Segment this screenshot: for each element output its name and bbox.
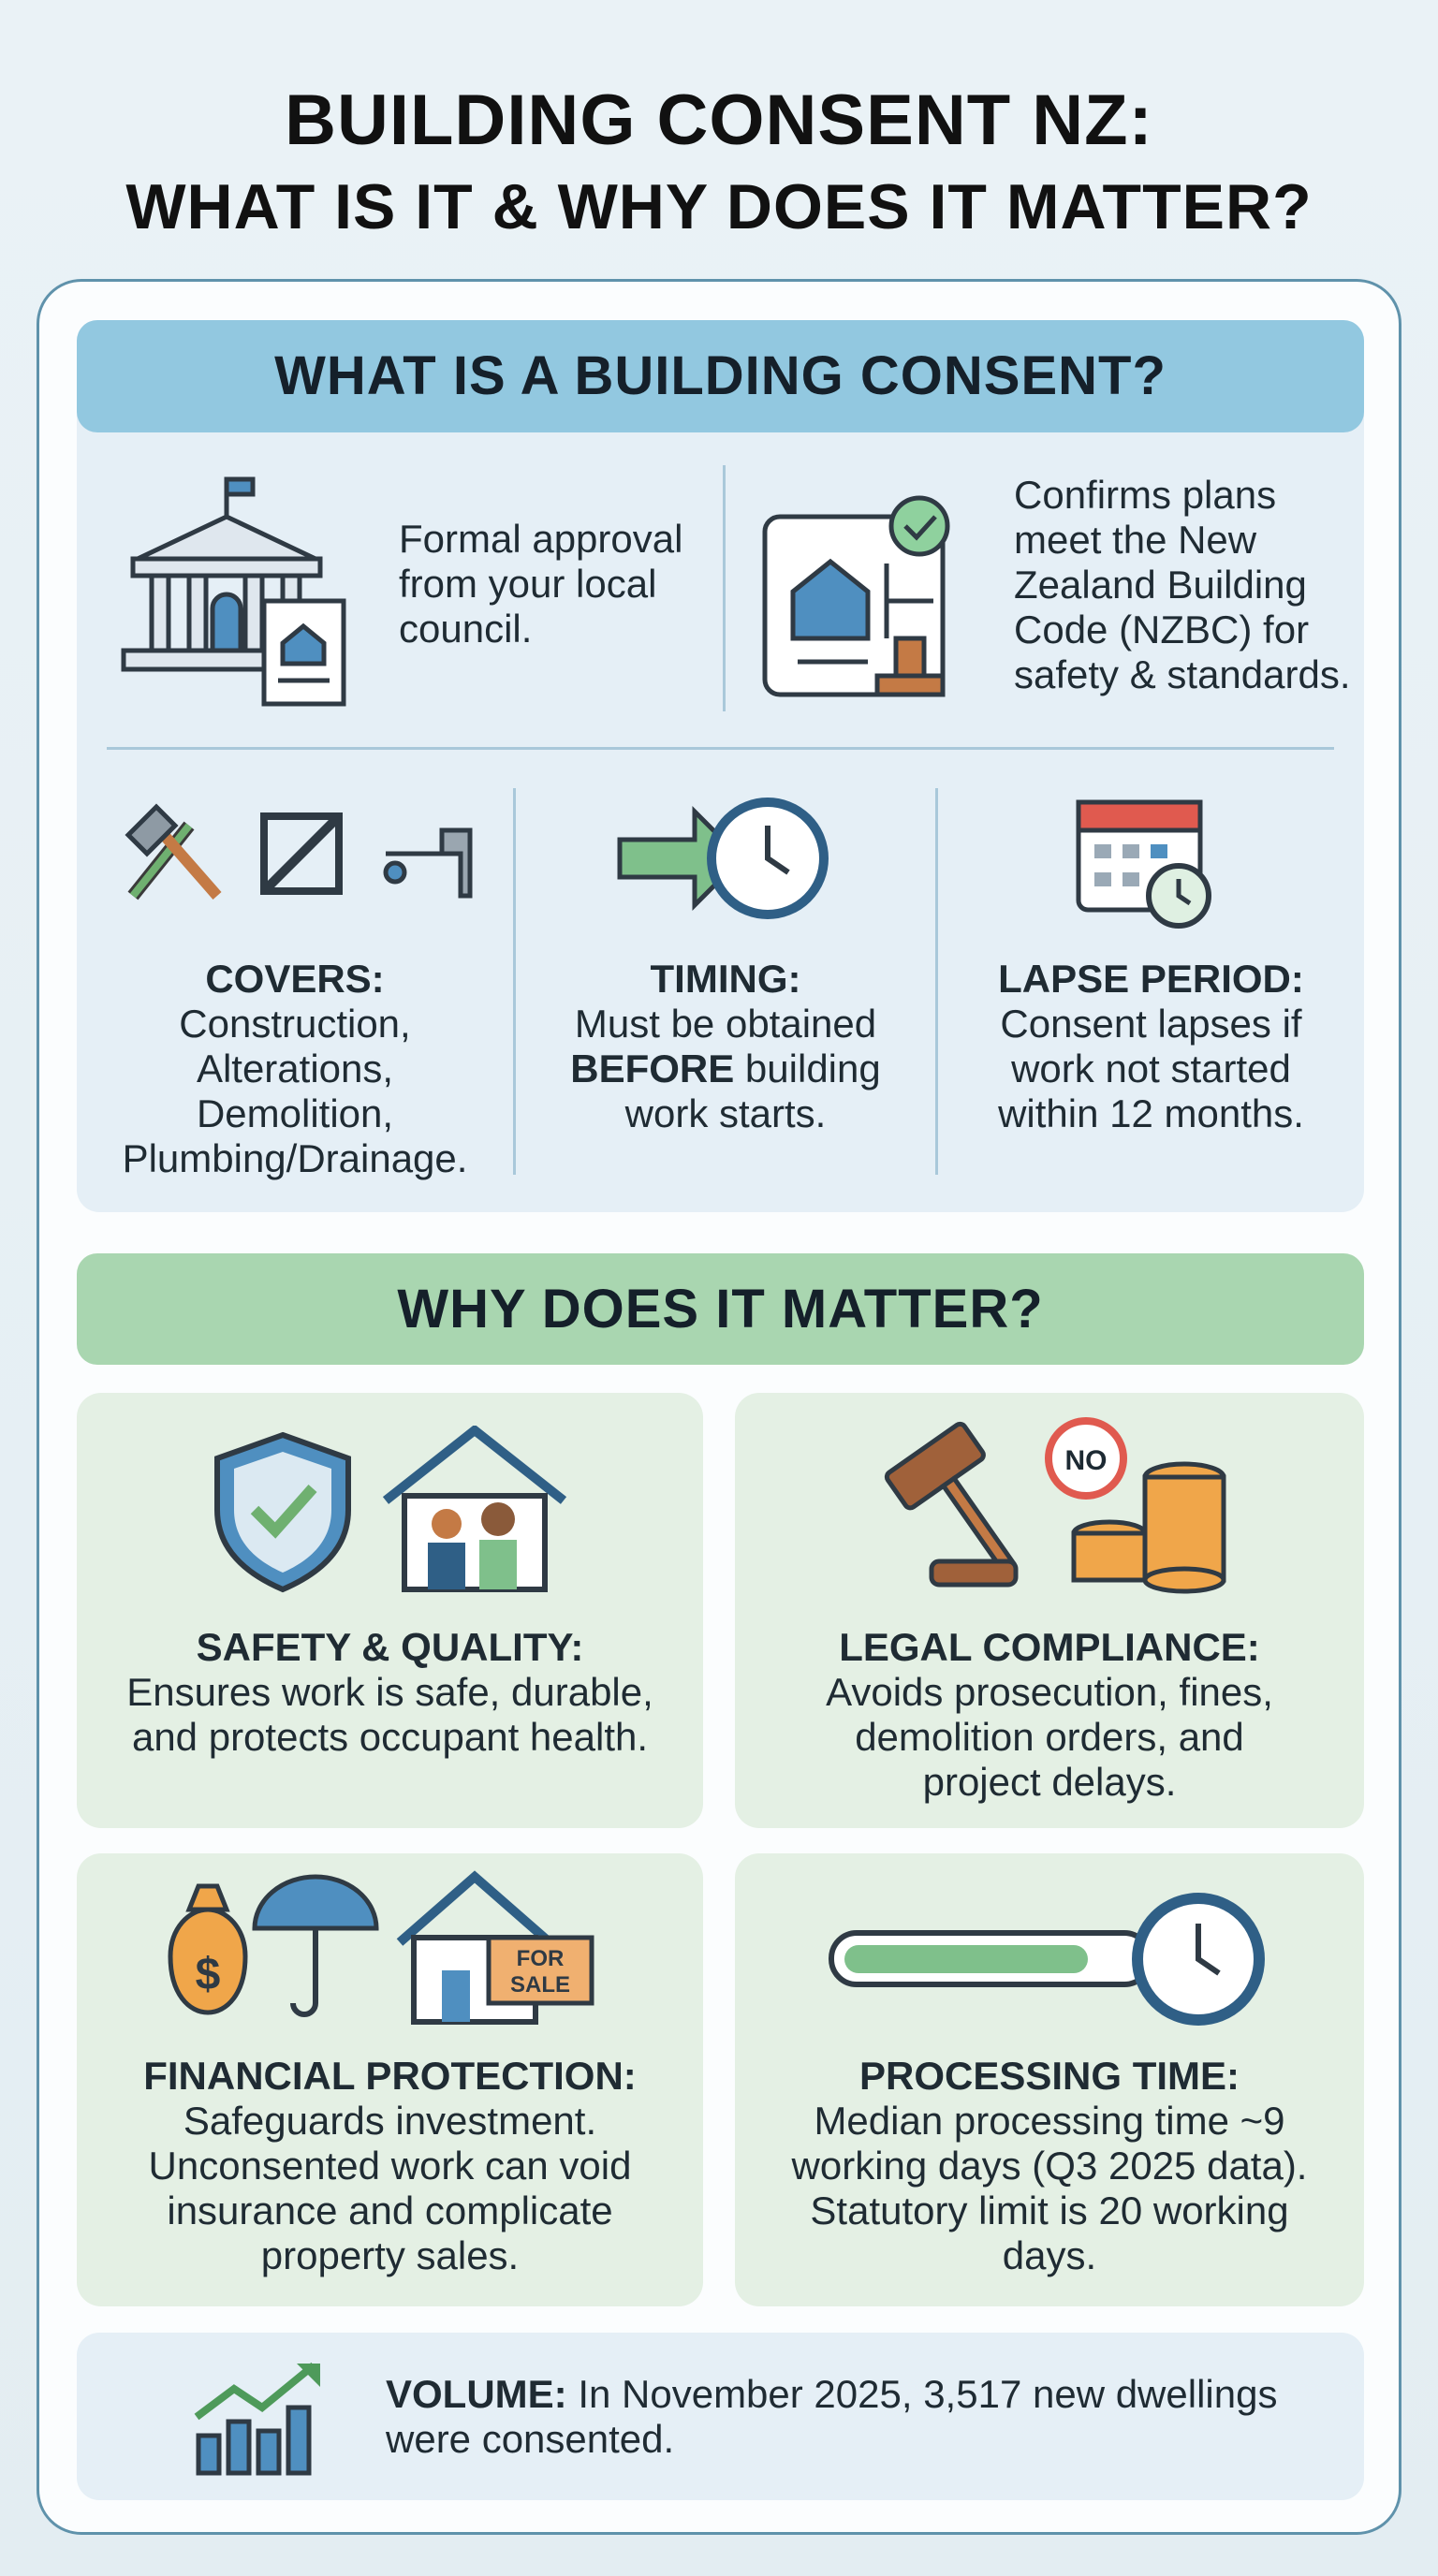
text: covers: Demolition, (197, 1091, 393, 1135)
icon: money umbrella house: SALE (510, 1972, 570, 1998)
heading: why: WHY DOES IT MATTER? (397, 1279, 1044, 1339)
text: lapse: work not started (1011, 1046, 1291, 1090)
text: formal approval: from your local (399, 562, 656, 606)
text: volume: were consented. (386, 2417, 674, 2461)
icon: gavel coins (884, 1417, 1226, 1593)
text: confirms plans: safety & standards. (1014, 652, 1351, 696)
text: legal (826, 1625, 1273, 1804)
icon: money umbrella house: $ (196, 1950, 221, 1999)
text: processing (792, 2054, 1307, 2277)
icon: tools (125, 803, 472, 900)
card: financial (77, 1853, 703, 2306)
text: timing: Must be obtained (575, 1002, 876, 1046)
text: legal: project delays. (923, 1760, 1176, 1804)
text: timing: BEFORE building (570, 1046, 881, 1090)
icon: council building (122, 477, 346, 706)
text: covers: COVERS: (205, 957, 385, 1001)
text: processing: working days (Q3 2025 data). (792, 2144, 1307, 2188)
text: safety: and protects occupant health. (132, 1715, 648, 1759)
title: BUILDING CONSENT NZ: (285, 80, 1153, 160)
icon: progress clock (829, 1893, 1265, 2026)
text: safety (126, 1625, 653, 1759)
text: financial (143, 2054, 637, 2277)
text: financial: property sales. (261, 2233, 519, 2277)
text: volume (386, 2372, 1277, 2461)
text: covers: Construction, (179, 1002, 411, 1046)
icon: plans (762, 496, 949, 696)
text: covers: Plumbing/Drainage. (123, 1136, 467, 1180)
text: financial: insurance and complicate (167, 2188, 613, 2232)
panel: volume (77, 2333, 1364, 2500)
text: legal: demolition orders, and (855, 1715, 1244, 1759)
text: confirms plans (1014, 473, 1351, 696)
text: formal approval: council. (399, 607, 532, 651)
text: timing (570, 957, 881, 1135)
text: lapse: Consent lapses if (1000, 1002, 1302, 1046)
text: financial: Unconsented work can void (149, 2144, 631, 2188)
divider (723, 465, 726, 711)
heading: why (77, 1253, 1364, 1365)
text: processing: Median processing time ~9 (814, 2099, 1285, 2143)
text: formal approval: Formal approval (399, 517, 682, 561)
text: confirms plans: meet the New (1014, 518, 1256, 562)
text: processing: days. (1003, 2233, 1096, 2277)
text: lapse (998, 957, 1304, 1135)
text: lapse: within 12 months. (998, 1091, 1304, 1135)
title: WHAT IS IT & WHY DOES IT MATTER? (125, 171, 1313, 242)
card: legal (735, 1393, 1364, 1828)
title (125, 80, 1313, 242)
icon: money umbrella house (169, 1870, 594, 2025)
text: legal: Avoids prosecution, fines, (826, 1670, 1273, 1714)
text: safety: SAFETY & QUALITY: (197, 1625, 583, 1669)
text: processing: PROCESSING TIME: (859, 2054, 1240, 2098)
text: legal: LEGAL COMPLIANCE: (839, 1625, 1260, 1669)
icon: shield house (214, 1426, 566, 1593)
text: confirms plans: Zealand Building (1014, 563, 1307, 607)
text: financial: Safeguards investment. (183, 2099, 596, 2143)
text: financial: FINANCIAL PROTECTION: (143, 2054, 637, 2098)
text: covers: Alterations, (197, 1046, 393, 1090)
text: lapse: LAPSE PERIOD: (998, 957, 1304, 1001)
icon: arrow clock (618, 798, 829, 919)
card: safety (77, 1393, 703, 1828)
card: processing (735, 1853, 1364, 2306)
text: formal approval (399, 517, 682, 651)
text: confirms plans: Code (NZBC) for (1014, 607, 1309, 651)
text: safety: Ensures work is safe, durable, (126, 1670, 653, 1714)
text: covers (123, 957, 467, 1180)
text: volume: VOLUME: In November 2025, 3,517 new dwellings (386, 2372, 1277, 2416)
heading: what is: WHAT IS A BUILDING CONSENT? (274, 345, 1167, 406)
icon: gavel coins: NO (1065, 1445, 1107, 1476)
icon: calendar (1077, 799, 1211, 929)
text: timing: TIMING: (651, 957, 800, 1001)
icon: chart (195, 2363, 320, 2475)
icon: money umbrella house: FOR (517, 1946, 564, 1971)
text: processing: Statutory limit is 20 working (810, 2188, 1289, 2232)
text: timing: work starts. (625, 1091, 826, 1135)
heading: what is (77, 320, 1364, 432)
text: confirms plans: Confirms plans (1014, 473, 1276, 517)
panel: what is (77, 320, 1364, 1212)
